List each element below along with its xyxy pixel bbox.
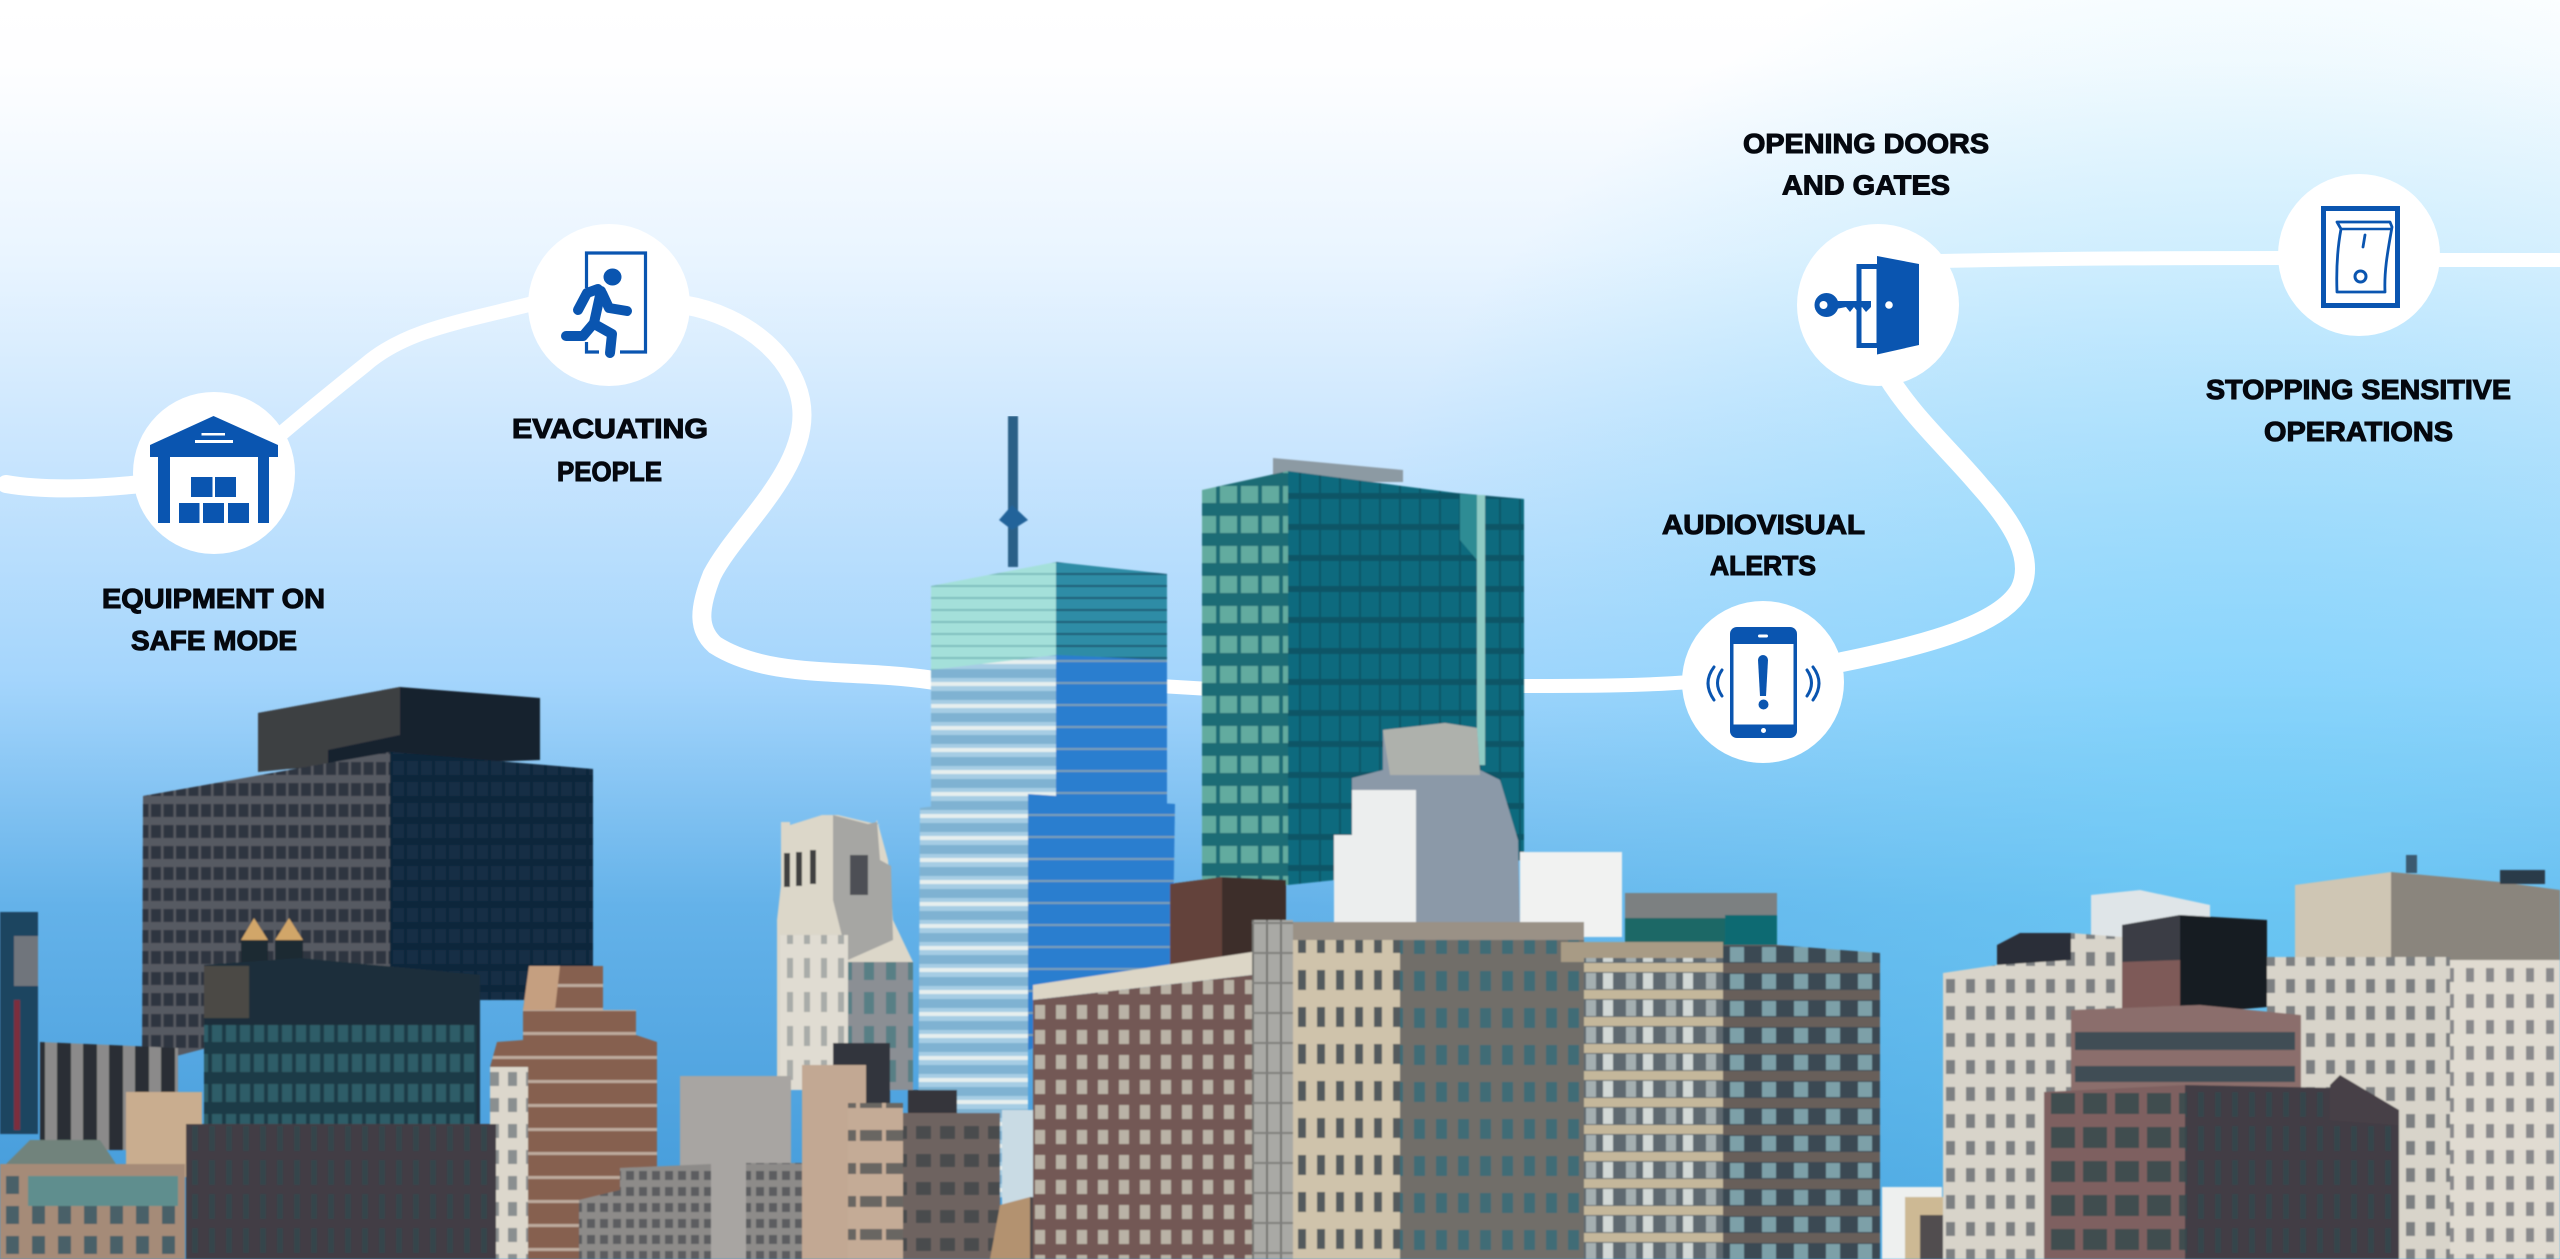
building: low colonnade xyxy=(40,1042,178,1150)
icon: phone alert xyxy=(1708,627,1819,738)
step: stopping sensitive operations xyxy=(2206,174,2511,447)
building: dark penthouse xyxy=(2122,915,2267,1020)
building: bottom-left block xyxy=(0,1140,185,1259)
label xyxy=(2206,374,2511,447)
node circle xyxy=(2278,174,2440,336)
node circle xyxy=(133,392,295,554)
building: tan block xyxy=(126,1092,202,1177)
building: tan and brown mid block xyxy=(802,1043,1000,1259)
skyline photo xyxy=(0,416,2560,1259)
building: banded residential xyxy=(1561,942,1880,1259)
label: OPERATIONS xyxy=(2264,416,2453,447)
label: STOPPING SENSITIVE xyxy=(2206,374,2511,405)
label xyxy=(102,583,325,656)
label: AUDIOVISUAL xyxy=(1662,509,1865,540)
building: brick tower xyxy=(490,966,657,1259)
label xyxy=(512,413,708,487)
step: audiovisual alerts xyxy=(1662,509,1865,763)
label: EVACUATING xyxy=(512,413,708,444)
building: red-brown block xyxy=(2044,1005,2399,1259)
label: AND GATES xyxy=(1782,170,1950,200)
building: green glass tower xyxy=(1202,458,1524,885)
icon: rocker switch xyxy=(2324,208,2398,306)
building: beige and grey tall xyxy=(1293,922,1584,1259)
building: rear cream block right xyxy=(2295,855,2560,970)
building: rear pale tower right xyxy=(2267,957,2560,1259)
building: ornate low roof xyxy=(990,1197,1092,1259)
building: small grid blocks xyxy=(579,1163,855,1259)
building: blue glass tower xyxy=(918,416,1175,1240)
step: evacuating people xyxy=(512,224,708,487)
building: penthouse glass xyxy=(1625,893,1777,960)
icon: warehouse xyxy=(150,416,278,523)
label xyxy=(1743,128,1989,200)
step: equipment on safe mode xyxy=(102,392,325,656)
label: ALERTS xyxy=(1710,550,1816,581)
building: dark front block xyxy=(204,918,480,1130)
building: wrapped white tower xyxy=(1334,723,1520,930)
label: EQUIPMENT ON xyxy=(102,583,325,614)
building: white box xyxy=(1520,852,1622,937)
icon: running person at door xyxy=(566,253,646,353)
label: SAFE MODE xyxy=(131,625,297,656)
node circle xyxy=(1797,224,1959,386)
label: PEOPLE xyxy=(557,456,662,487)
building: brick residential xyxy=(1033,920,1293,1259)
node circle xyxy=(1682,601,1844,763)
label xyxy=(1662,509,1865,581)
building: dark maroon lower block xyxy=(186,1124,496,1259)
node circle xyxy=(528,224,690,386)
building: low white and tan corner xyxy=(1882,1187,2034,1259)
label: OPENING DOORS xyxy=(1743,128,1989,159)
icon: key and door xyxy=(1814,256,1919,354)
building: grey slab xyxy=(680,1076,791,1259)
route line xyxy=(6,258,2560,689)
building: dark tower xyxy=(142,687,593,1065)
building: white tower right xyxy=(1943,890,2210,1259)
building: cream tower centre-left xyxy=(777,815,913,1090)
building: far-left glass tower xyxy=(0,912,38,1134)
step: opening doors and gates xyxy=(1743,128,1989,386)
building: dark brown box xyxy=(1170,877,1286,975)
